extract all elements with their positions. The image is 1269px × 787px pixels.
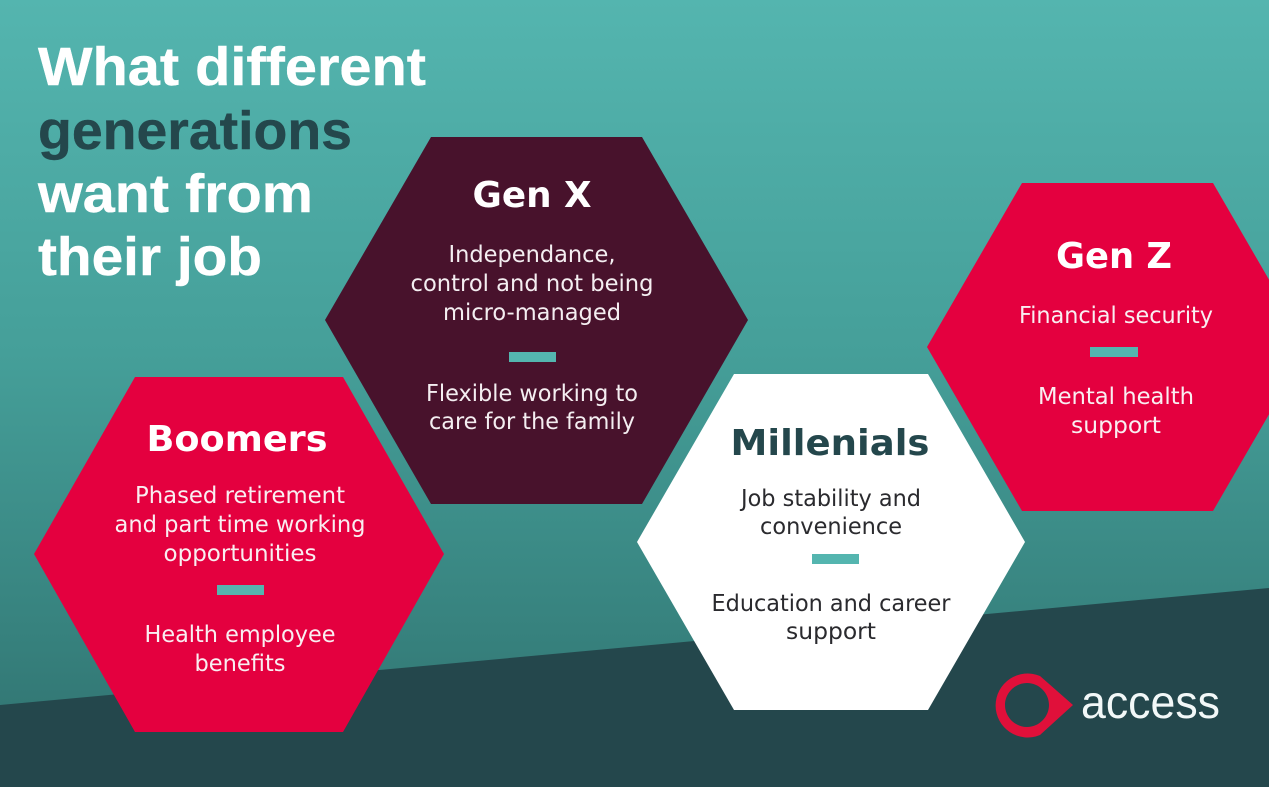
text: Gen Z needs: Mental health — [1038, 384, 1194, 410]
title: want from — [37, 164, 313, 224]
heading: Boomers: Boomers — [146, 419, 328, 460]
text: Gen Z needs — [1019, 303, 1213, 439]
text: Gen X needs: care for the family — [429, 409, 635, 435]
text: Gen Z needs: Financial security — [1019, 303, 1213, 329]
text: Boomers needs: benefits — [194, 651, 286, 677]
title: their job — [38, 227, 262, 287]
text: Boomers needs: opportunities — [164, 541, 316, 567]
title: generations — [38, 101, 352, 161]
title: What different — [38, 37, 426, 97]
panel: Boomers hexagon — [34, 377, 444, 732]
logo wordmark: access — [1081, 676, 1220, 728]
text: Gen X needs: control and not being — [410, 271, 654, 297]
text: Millenials needs — [712, 486, 951, 645]
text: Boomers needs: Health employee — [144, 622, 336, 648]
dark angled footer band — [0, 588, 1269, 787]
text: Millenials needs: support — [786, 619, 876, 645]
text: Gen X needs — [410, 242, 654, 435]
icon: access logo mark — [996, 673, 1073, 738]
title — [37, 37, 426, 287]
panel: Gen Z hexagon — [927, 183, 1269, 511]
text: Boomers needs: Phased retirement — [135, 483, 345, 509]
panel: Millenials hexagon — [637, 374, 1025, 710]
text: Millenials needs: Education and career — [712, 591, 951, 617]
text: Gen X needs: Independance, — [448, 242, 616, 268]
text: Millenials needs: convenience — [760, 514, 902, 540]
text: Gen Z needs: support — [1071, 413, 1161, 439]
heading: Gen X: Gen X — [472, 175, 592, 216]
text: Gen X needs: micro-managed — [443, 300, 621, 326]
logo: access — [996, 673, 1220, 738]
text: Millenials needs: Job stability and — [739, 486, 921, 512]
text: Boomers needs — [114, 483, 366, 677]
text: Boomers needs: and part time working — [114, 512, 366, 538]
panel: Gen X hexagon — [325, 137, 748, 504]
heading: Millenials: Millenials — [730, 423, 930, 464]
text: Gen X needs: Flexible working to — [426, 381, 638, 407]
heading: Gen Z: Gen Z — [1056, 236, 1172, 277]
